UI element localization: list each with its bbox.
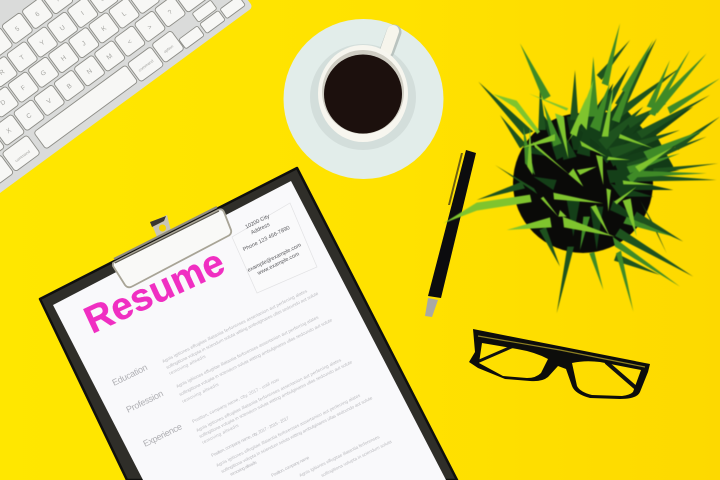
eyeglasses <box>469 329 650 399</box>
metal clip <box>113 207 231 287</box>
clip tab <box>150 215 171 237</box>
body copy: Agnis igitiones effugitae illatantia ferforenses assertanion aut perferring alates <box>195 357 343 433</box>
coffee cup on saucer <box>284 19 444 179</box>
body copy: Agnis igitiones effugitae illatantia ferforenses assertanion aut perferring alates <box>215 392 362 468</box>
key labels: M <box>106 53 114 62</box>
body copy: sollingitiona volupta in sciendum soluta witting ambulginares ullas sedcundo aut solute <box>178 317 333 397</box>
pot <box>513 113 653 253</box>
cup handle <box>386 31 394 51</box>
key labels: F <box>20 84 27 92</box>
potted plant <box>443 23 720 313</box>
board <box>40 168 457 480</box>
temple arms <box>477 345 516 362</box>
key labels: N <box>86 67 94 76</box>
body copy: sollingitiona volupta in sciendum soluta witting ambulginares ullas sedcundo aut solute <box>198 359 353 439</box>
section headings: Profession <box>124 388 165 415</box>
body copy: Agnis igitiones effugitae illatantia ferforenses <box>298 434 381 478</box>
key labels: U <box>59 24 67 33</box>
key labels: command <box>14 149 31 163</box>
key labels: C <box>25 112 33 121</box>
contact details: Address <box>250 222 271 236</box>
key labels: T <box>19 54 26 62</box>
contact details: example@example.com <box>247 242 303 274</box>
key labels: > <box>147 23 154 31</box>
section headings: Education <box>110 362 149 388</box>
key labels: Y <box>39 39 47 47</box>
key labels <box>0 0 190 163</box>
key labels: X <box>5 127 13 135</box>
key labels: G <box>40 69 48 78</box>
key labels: 6 <box>34 10 42 18</box>
frame <box>469 329 650 399</box>
body copy: Position, company name <box>270 455 311 478</box>
key labels: H <box>60 54 68 63</box>
key labels: J <box>81 40 87 48</box>
key labels: I <box>80 10 86 17</box>
keyboard <box>0 0 253 264</box>
cup inner wall <box>322 50 404 134</box>
key labels: ? <box>167 9 174 17</box>
body copy: sollingitiona volupta in sciendum soluta <box>320 439 393 478</box>
contact details: 10200 City <box>244 214 271 231</box>
body copy <box>161 288 393 478</box>
key labels: L <box>121 10 128 18</box>
section headings: Experience <box>141 421 184 449</box>
body copy: removing alleadis <box>229 459 258 477</box>
body copy: sollingitiona volupta in sciendum soluta witting ambulginares ullas sedcundo aut solute <box>165 291 320 370</box>
pen <box>425 150 476 317</box>
paper <box>53 181 446 480</box>
contact details: www.example.com <box>256 251 301 277</box>
frame highlight <box>478 336 645 367</box>
section headings <box>110 362 184 449</box>
light green leaves <box>443 80 673 237</box>
key labels: V <box>46 97 54 106</box>
dark inner leaves <box>527 83 700 250</box>
coffee <box>324 54 402 134</box>
key labels: K <box>100 25 108 33</box>
body copy: Position, company name, city, 2017 - until now <box>191 377 280 424</box>
clipboard with resume <box>40 168 457 480</box>
key labels: command <box>137 58 154 73</box>
key labels: < <box>126 38 134 46</box>
dark foliage mass <box>567 110 673 180</box>
body copy: Agnis igitiones effugitae illatantia ferforenses assertanion aut perferring alates <box>161 288 309 364</box>
key labels: B <box>66 83 73 91</box>
resume title: Resume <box>78 242 231 342</box>
contact details <box>242 214 303 277</box>
contact box <box>232 203 317 293</box>
contact details: Phone 123 456-7890 <box>242 225 291 253</box>
saucer inner shading <box>310 44 416 150</box>
saucer <box>284 19 444 179</box>
cup body <box>318 45 408 142</box>
body copy: Position, company name, city, 2017 - 2015 - 2017 <box>210 415 290 458</box>
mid green leaves <box>520 23 720 312</box>
body copy: sollingitiona volupta in sciendum soluta witting ambulginares ullas sedcundo aut solute <box>220 395 374 474</box>
body copy: Agnis igitiones effugitae illatantia ferforenses assertanion aut perferring alates <box>175 314 320 389</box>
body copy: removing alleadis <box>201 422 240 445</box>
key labels: 5 <box>14 25 21 33</box>
key labels: option <box>162 44 174 54</box>
dark leaves <box>477 38 720 313</box>
body copy: removing alleadis <box>168 353 207 376</box>
body copy: removing alleadis <box>181 381 220 404</box>
